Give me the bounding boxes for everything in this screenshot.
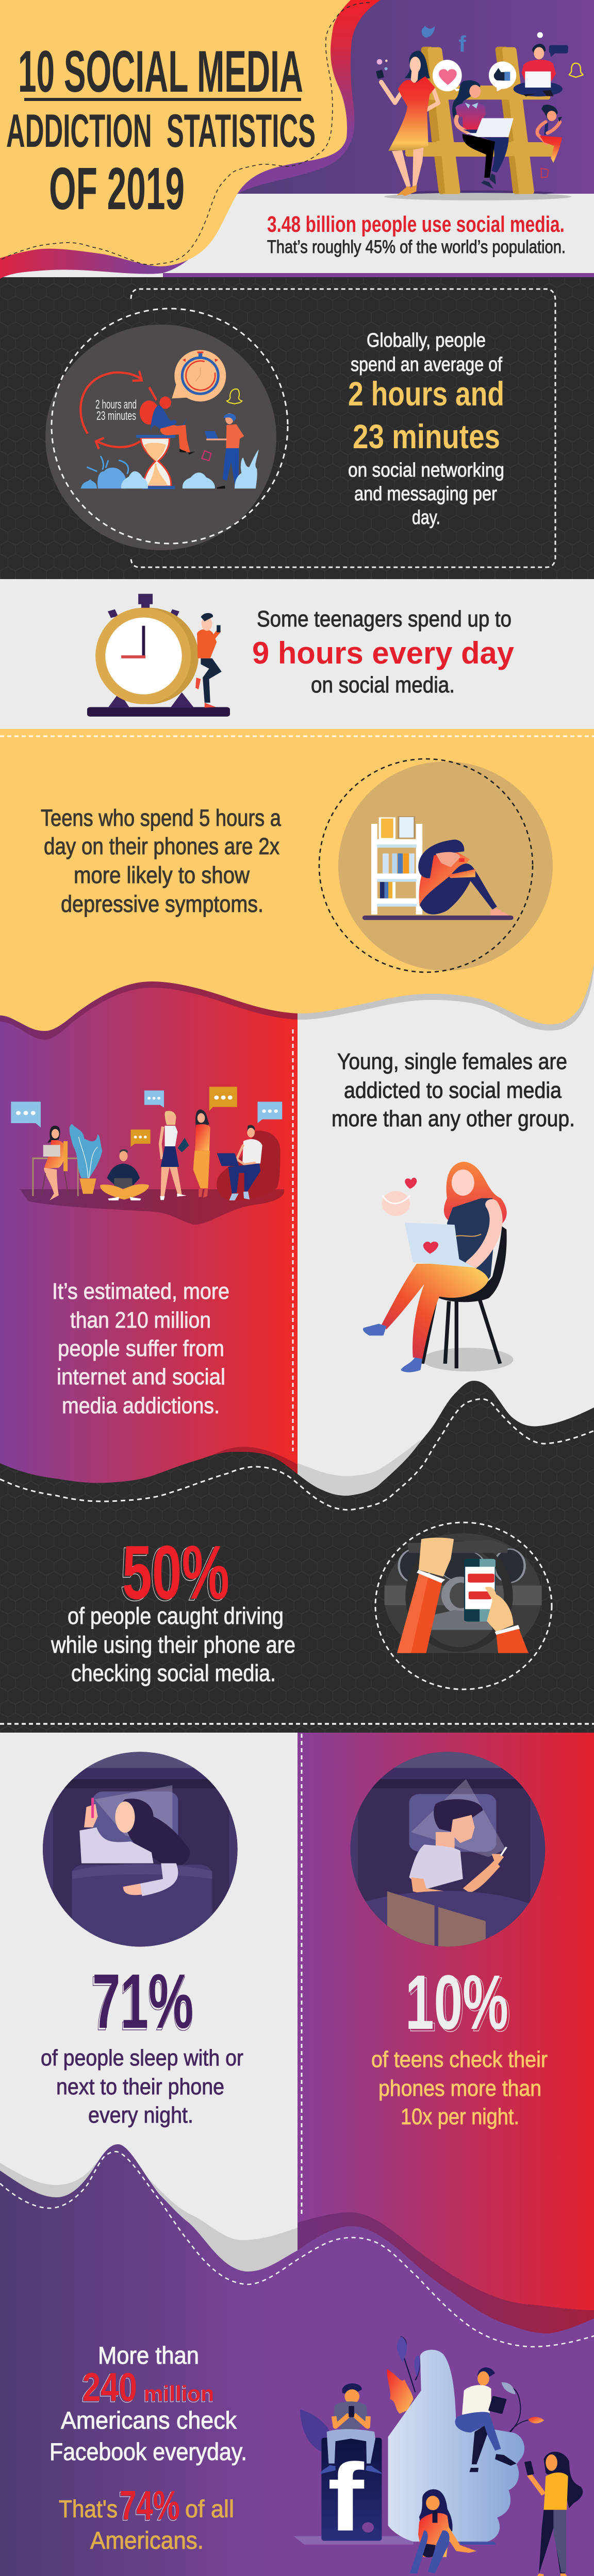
- title: ADDICTION STATISTICS: [6, 105, 316, 157]
- big number: 50%: 50%: [122, 1530, 229, 1615]
- panel: 50 percent driving: [0, 1381, 594, 1733]
- dashed frame: [131, 289, 555, 567]
- stat text: 240 million Americans: million: [144, 2381, 214, 2405]
- title: 10 SOCIAL MEDIA: [18, 39, 303, 105]
- illustration: people on a hashtag: [376, 26, 583, 200]
- big number: 71%: 71%: [92, 1958, 193, 2044]
- big number: 10%: [405, 1959, 510, 2047]
- big number: 71%: 71%: [91, 1960, 193, 2046]
- stat text: sleep with phone: next to their phone: [56, 2074, 224, 2099]
- panel: 240 million Facebook: [0, 2144, 594, 2576]
- panel: single females column: [298, 974, 594, 1494]
- stat text: 74% of all Americans: 74%: [120, 2482, 180, 2528]
- stat text: 2 hours and 23 minutes: 2 hours and: [348, 375, 504, 413]
- stat text: teens check phones: of teens check their: [371, 2047, 548, 2072]
- big number: 50%: 50%: [120, 1532, 227, 1617]
- small caption in illustration: 23 minutes: [96, 409, 136, 423]
- stat text: teens check phones: [371, 2047, 548, 2129]
- stat text: teens 2x depressive symptoms: more likely to show: [74, 862, 250, 888]
- panel: 10 percent teens check phones: [298, 1733, 594, 2366]
- stat text: 74% of all Americans: 74%: [119, 2483, 179, 2529]
- stat text: 3.48 billion: [267, 212, 566, 257]
- grey circle backdrop: [45, 325, 276, 550]
- stat text: 210 million: than 210 million: [70, 1308, 211, 1333]
- big number: 10%: 10%: [405, 1959, 508, 2045]
- stat text: 9 hours every day: [252, 606, 515, 698]
- yellow title blob: [0, 0, 351, 266]
- stat text: 210 million: media addictions.: [62, 1393, 220, 1418]
- panel: hero header: [0, 0, 594, 279]
- stat text: teens 2x depressive symptoms: Teens who spend 5 hours a: [41, 805, 282, 831]
- stat text: 210 million: [52, 1279, 229, 1418]
- stat text: young single females: Young, single females are: [337, 1049, 567, 1074]
- stat text: 210 million: It’s estimated, more: [52, 1279, 229, 1304]
- illustration: group of people chatting: [11, 1087, 284, 1225]
- panel: gradient column estimated addicts: [0, 974, 298, 1494]
- stat text: teens check phones: 10x per night.: [401, 2104, 519, 2129]
- tan circle backdrop: [338, 761, 553, 971]
- stat text: 9 hours every day: Some teenagers spend up to: [257, 606, 512, 632]
- stat text: 74% of all Americans: of all: [185, 2495, 234, 2522]
- stat text: 240 million Americans: [50, 2342, 247, 2465]
- illustration: thumbs up and people with phones: [293, 2336, 583, 2576]
- stat text: 210 million: internet and social: [57, 1364, 225, 1389]
- stat text: young single females: addicted to social media: [344, 1078, 562, 1103]
- stat text: 74% of all Americans: [59, 2482, 234, 2554]
- stat text: 240 million Americans: million: [143, 2382, 213, 2406]
- illustration: time cycle, hourglass and people: [80, 350, 259, 489]
- stat text: 2 hours and 23 minutes: Globally, people: [367, 330, 486, 351]
- illustration: thumbs up and people with phones: f: [327, 2444, 365, 2551]
- stat text: 74% of all Americans: Americans.: [90, 2527, 204, 2554]
- stat text: caught driving: of people caught driving: [68, 1603, 284, 1629]
- stat text: sleep with phone: every night.: [88, 2103, 193, 2128]
- stat text: 2 hours and 23 minutes: and messaging per: [354, 483, 497, 505]
- stat text: sleep with phone: [41, 2045, 243, 2128]
- small caption in illustration: [95, 398, 137, 423]
- illustration: woman in bed with phone: [38, 1751, 244, 1951]
- stat text: 240 million Americans: 240: [81, 2365, 136, 2411]
- illustration: woman on chair with laptop: [363, 1162, 514, 1372]
- stat text: 74% of all Americans: That's: [59, 2495, 118, 2522]
- stat text: 2 hours and 23 minutes: spend an average of: [351, 354, 502, 376]
- panel: global average time: [0, 277, 594, 579]
- stat text: 2 hours and 23 minutes: [348, 330, 504, 529]
- stat text: teens check phones: phones more than: [378, 2076, 541, 2101]
- stat text: 2 hours and 23 minutes: on social networking: [348, 460, 504, 481]
- stat text: 2 hours and 23 minutes: day.: [412, 507, 440, 529]
- stat text: 9 hours every day: 9 hours every day: [252, 636, 515, 670]
- stat text: 210 million: people suffer from: [58, 1336, 224, 1361]
- stat text: sleep with phone: of people sleep with or: [41, 2045, 243, 2071]
- stat text: 2 hours and 23 minutes: 23 minutes: [353, 417, 500, 455]
- big number: 71%: [91, 1958, 193, 2046]
- stat text: caught driving: while using their phone are: [51, 1632, 295, 1658]
- dashed circle outline: [319, 759, 533, 972]
- big number: 10%: 10%: [407, 1961, 510, 2047]
- dashed circle outline: [375, 1522, 552, 1689]
- stat text: teens 2x depressive symptoms: day on their phones are 2x: [44, 833, 279, 859]
- stat text: teens 2x depressive symptoms: depressive symptoms.: [61, 891, 263, 917]
- stat text: caught driving: checking social media.: [71, 1660, 276, 1686]
- stat text: 240 million Americans: More than: [98, 2342, 199, 2369]
- panel: teenagers 9 hours: [0, 579, 594, 729]
- stat text: 240 million Americans: Americans check: [61, 2406, 237, 2434]
- decorative band behind the yellow blob: [0, 0, 381, 279]
- title: OF 2019: [49, 155, 185, 222]
- panel: teens depressive symptoms: [0, 729, 594, 1040]
- panel: 71 percent sleep with phone: [41, 1752, 243, 2128]
- stat text: caught driving: [51, 1603, 295, 1686]
- dashed column divider: [292, 1029, 294, 1451]
- stat text: teens 2x depressive symptoms: [41, 805, 282, 917]
- title: [6, 39, 316, 222]
- small caption in illustration: 2 hours and: [95, 398, 137, 412]
- stat text: 9 hours every day: on social media.: [311, 672, 455, 698]
- illustration: stopwatch and teen: [87, 594, 230, 717]
- illustration: people on a hashtag: f: [458, 32, 466, 57]
- dashed circle outline: [52, 309, 288, 544]
- illustration: sad girl by bookshelf: [362, 817, 514, 920]
- illustration: man in bed with phone: [345, 1751, 549, 1951]
- stat text: 240 million Americans: Facebook everyday.: [50, 2438, 247, 2465]
- illustration: hands on wheel with phone: [384, 1533, 542, 1659]
- stat text: 240 million Americans: 240: [82, 2364, 137, 2410]
- stat text: young single females: [332, 1049, 575, 1131]
- dashed column divider: [301, 1734, 302, 2216]
